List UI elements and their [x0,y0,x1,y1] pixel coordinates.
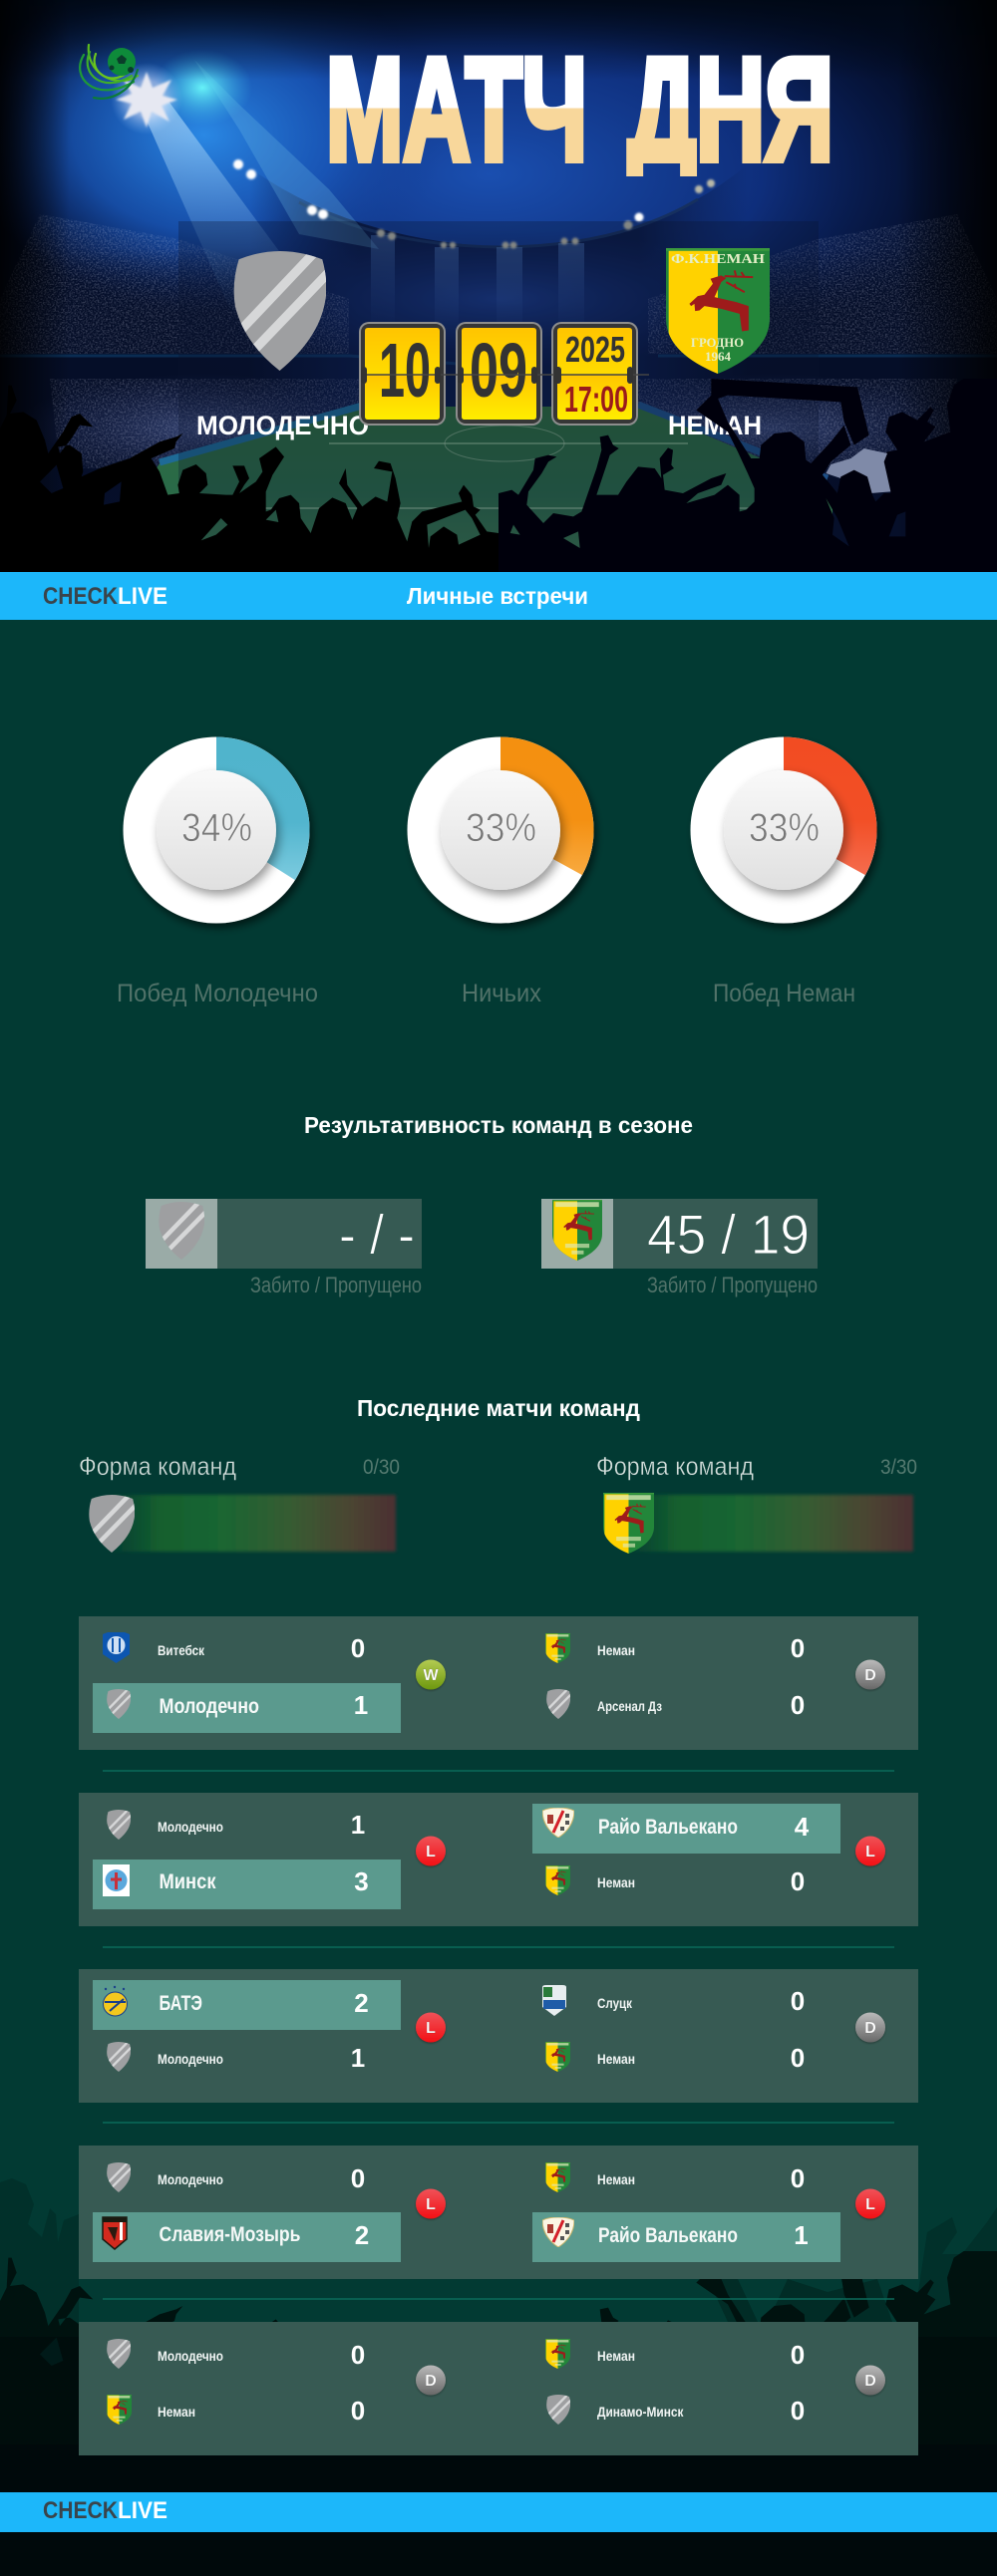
right home: Слуцк: 0 [791,1986,805,2016]
icon: Динамо-Минск shield [546,2395,570,2425]
date card: day [359,322,446,426]
team logo: Молодечно [234,251,328,371]
title: ДНЯ [628,28,833,190]
icon: Молодечно shield [107,1689,131,1719]
donut: wins Молодечно [124,737,310,923]
match panel 1 [79,1616,918,1750]
left home: Молодечно: 0 [351,2163,365,2193]
left away: Молодечно: 1 [354,1690,368,1720]
left away: Неман: 0 [351,2396,365,2426]
match panel 2 [79,1793,918,1926]
goals box: Молодечно [146,1199,422,1269]
left away: Молодечно: Молодечно [158,2052,223,2067]
right home: Неман: 0 [791,2163,805,2193]
divider lines [103,1771,894,2299]
result badge: loss [416,2013,446,2043]
result badge: draw [855,1660,885,1690]
icon: Молодечно shield [107,2042,131,2072]
bottom blue bar [0,2492,997,2532]
icon: Неман shield [545,2339,570,2369]
right home: Неман [597,2163,805,2193]
left away: Молодечно [160,1690,368,1720]
team logo: Неман: Ф.К.НЕМАН [671,252,765,267]
team logo: Неман: 1964 [705,349,732,364]
left home: Витебск: Витебск [158,1643,204,1658]
left away: Минск: 3 [354,1866,369,1896]
right home: Неман: Неман [597,2349,635,2364]
right away: Арсенал Дз: Арсенал Дз [597,1699,662,1714]
left home: Молодечно [158,2340,365,2370]
heading: season scoring: Результативность команд в сезоне [304,1112,693,1138]
brand logo: CHECK [43,583,119,610]
result badge: loss: L [426,2020,436,2037]
result badge: draw: D [864,1667,876,1684]
result badge: loss: L [426,2196,436,2213]
left home: Витебск [158,1633,365,1663]
league logo [80,45,138,99]
left away: Неман: Неман [158,2405,195,2420]
donut caption: wins Молодечно: Побед Молодечно [117,980,318,1007]
crowd silhouette left [0,386,498,572]
left away: Молодечно: 1 [351,2043,365,2073]
goals caption: Молодечно: Забито / Пропущено [250,1273,422,1297]
date card: year and kick-off time [551,322,638,426]
team logo: Неман [666,248,770,374]
icon: Райо Вальекано crest [542,1808,574,1838]
donut: wins Неман: 33% [749,806,820,850]
icon: Неман shield [107,2395,132,2425]
result badge: loss: L [865,2196,875,2213]
result badge: loss [416,1836,446,1865]
right home: Неман [597,2340,805,2370]
crowd silhouette right with raised scarf [498,379,997,572]
result badge: loss: L [865,1844,875,1860]
right home: Райо Вальекано: Райо Вальекано [598,1816,738,1839]
right away: Неман: 0 [791,2043,805,2073]
left away: Славия-Мозырь: Славия-Мозырь [160,2223,301,2246]
icon: Витебск crest [103,1632,130,1663]
form block: Молодечно [79,1451,400,1553]
left home: БАТЭ [160,1988,369,2018]
result badge: draw [416,2366,446,2396]
result badge: draw: D [425,2373,437,2390]
right away: Райо Вальекано: Райо Вальекано [598,2224,738,2247]
result badge: win: W [423,1667,439,1684]
right away: Райо Вальекано [598,2220,809,2250]
result badge: loss [855,1836,885,1865]
top blue bar [0,572,997,620]
team logo: Неман: ГРОДНО [691,335,744,350]
icon: БАТЭ crest [104,1986,128,2016]
right home: Неман: Неман [597,2172,635,2187]
date card: month [456,322,542,426]
flip card hinge line [361,367,649,384]
bottom blue bar: CHECK [43,2497,119,2524]
date card: year and kick-off time: 17:00 [564,379,628,420]
left home: Молодечно: Молодечно [158,2172,223,2187]
team name: Неман: НЕМАН [668,411,762,440]
left home: Молодечно: 0 [351,2340,365,2370]
right away: Динамо-Минск: 0 [791,2396,805,2426]
right home: Неман: Неман [597,1643,635,1658]
left home: БАТЭ: 2 [354,1988,369,2018]
right away: Динамо-Минск [597,2396,805,2426]
icon: Слуцк crest [542,1985,566,2016]
form block: Неман [596,1451,917,1554]
right away: Динамо-Минск: Динамо-Минск [597,2405,684,2420]
goals box: Молодечно: - / - [339,1203,415,1266]
result badge: loss [855,2188,885,2218]
brand logo [43,583,167,610]
right away: Неман [597,2043,805,2073]
form block: Неман: 3/30 [880,1456,917,1479]
result badge: draw [855,2013,885,2043]
donut caption: wins Неман: Побед Неман [713,980,855,1007]
left away: Молодечно [158,2043,365,2073]
left home: Молодечно: 1 [351,1810,365,1840]
match panel 3 [79,1969,918,2103]
icon: Неман shield [545,1865,570,1895]
icon: Неман shield [545,2042,570,2072]
date card: month: 09 [470,328,527,414]
bottom blue bar: LIVE [118,2497,167,2524]
title: МАТЧ [326,28,587,190]
right home: Райо Вальекано: 4 [795,1812,810,1842]
right home: Неман [597,1633,805,1663]
result badge: draw [855,2366,885,2396]
date card: day: 10 [379,328,431,414]
right home: Неман: 0 [791,2340,805,2370]
left away: Молодечно: Молодечно [160,1695,259,1718]
right home: Слуцк [597,1986,805,2016]
goals box: Неман: 45 / 19 [647,1203,810,1266]
donut caption: draws: Ничьих [462,980,541,1007]
result badge: win [416,1660,446,1690]
left away: Славия-Мозырь: 2 [355,2220,369,2250]
result badge: draw: D [864,2373,876,2390]
icon: Молодечно shield [107,2339,131,2369]
icon: Минск crest [103,1864,130,1896]
icon: Райо Вальекано crest [542,2217,574,2247]
form block: Неман: Форма команд [596,1451,754,1481]
left away: Славия-Мозырь [160,2220,369,2250]
icon: Неман shield [545,1633,570,1663]
team name: Молодечно: МОЛОДЕЧНО [196,411,369,440]
donut: wins Молодечно: 34% [181,806,252,850]
icon: Арсенал shield [546,1689,570,1719]
right home: Слуцк: Слуцк [597,1996,632,2011]
icon: Неман shield [545,2162,570,2192]
form block: Молодечно: 0/30 [363,1456,400,1479]
result badge: loss: L [426,1844,436,1860]
title [329,56,830,176]
right away: Неман: Неман [597,2052,635,2067]
match panel 4 [79,2146,918,2279]
result badge: draw: D [864,2020,876,2037]
donut: draws [407,737,594,923]
right away: Неман: 0 [791,1866,805,1896]
left home: Витебск: 0 [351,1633,365,1663]
donut: draws: 33% [466,806,536,850]
left home: Молодечно [158,2163,365,2193]
donut: wins Неман [690,737,877,923]
left away: Минск [160,1866,369,1896]
heading: recent matches: Последние матчи команд [357,1395,640,1421]
brand logo: LIVE [118,583,167,610]
hero stadium scene [0,0,997,572]
match panel overlay [178,221,819,572]
result badge: loss [416,2188,446,2218]
left home: Молодечно: Молодечно [158,2349,223,2364]
goals box: Неман [541,1199,818,1269]
right away: Неман: Неман [597,1875,635,1890]
left home: Молодечно [158,1810,365,1840]
right away: Райо Вальекано: 1 [794,2220,809,2250]
right away: Неман [597,1866,805,1896]
left away: Минск: Минск [160,1870,216,1893]
right home: Неман: 0 [791,1633,805,1663]
match panel 5 [79,2322,918,2455]
icon: Молодечно shield [107,2162,131,2192]
body crowd backdrop [0,2093,997,2576]
left away: Неман [158,2396,365,2426]
right away: Арсенал Дз: 0 [791,1690,805,1720]
icon: Славия-Мозырь crest [103,2217,127,2249]
form block: Молодечно: Форма команд [79,1451,236,1481]
left home: Молодечно: Молодечно [158,1820,223,1835]
goals caption: Неман: Забито / Пропущено [647,1273,818,1297]
date card: year and kick-off time: 2025 [565,329,625,370]
icon: Молодечно shield [107,1810,131,1840]
heading: head-to-head: Личные встречи [407,583,588,609]
right home: Райо Вальекано [598,1812,810,1842]
left home: БАТЭ: БАТЭ [160,1992,202,2015]
stadium floodlights [111,63,715,249]
right away: Арсенал Дз [597,1690,805,1720]
